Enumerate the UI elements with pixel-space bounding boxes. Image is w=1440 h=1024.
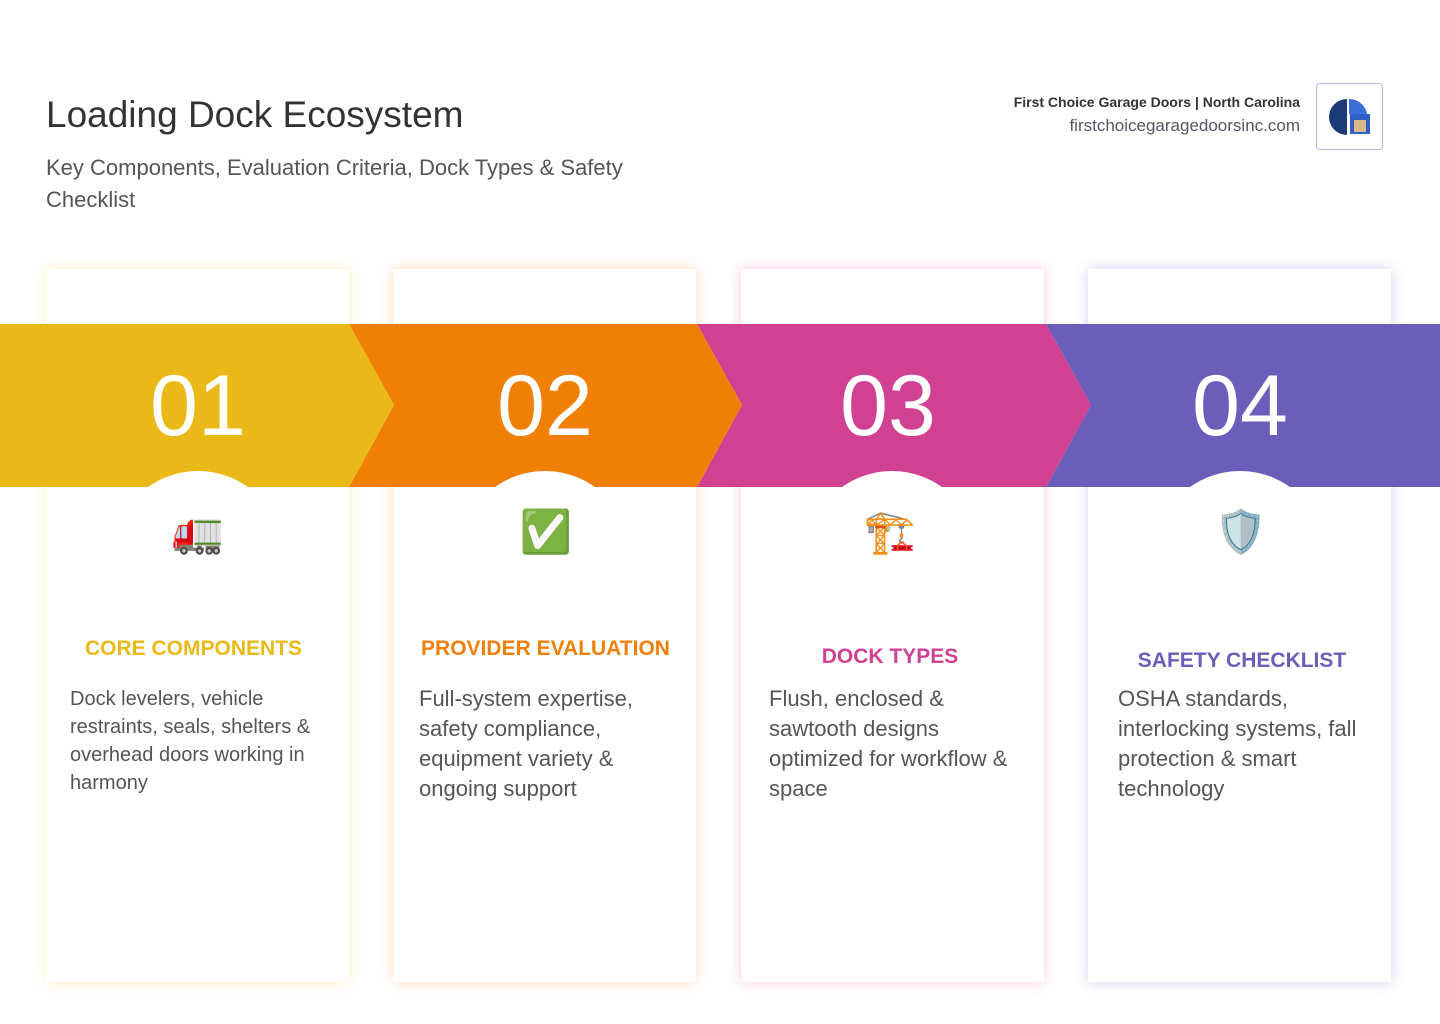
icon: shield: 🛡️ (1215, 508, 1267, 555)
card 2 (393, 269, 696, 982)
heading: provider evaluation: PROVIDER EVALUATION (421, 637, 670, 660)
text: core: Dock levelers, vehicle restraints, seals, shelters & overhead doors working in harmony (70, 688, 310, 794)
brand block: firstchoicegaragedoorsinc.com (1069, 116, 1300, 135)
text: dock types: Flush, enclosed & sawtooth designs optimized for workflow & space (769, 686, 1007, 801)
card 3 (741, 269, 1044, 982)
icon: truck: 🚛 (172, 508, 224, 555)
text: provider: Full-system expertise, safety compliance, equipment variety & ongoing support (419, 686, 633, 801)
icon: crane: 🏗️ (864, 508, 916, 555)
heading: dock types: DOCK TYPES (822, 645, 958, 668)
heading: core components: CORE COMPONENTS (85, 637, 302, 660)
arrow band: 04 (1192, 358, 1288, 454)
heading: safety checklist: SAFETY CHECKLIST (1138, 649, 1346, 672)
subtitle: Key Components, Evaluation Criteria, Dock Types & Safety Checklist (46, 155, 623, 212)
logo (1316, 83, 1383, 150)
title: Loading Dock Ecosystem (46, 94, 463, 135)
card 1 (46, 269, 349, 982)
arrow band: 03 (840, 358, 936, 454)
arrow band: 02 (497, 358, 593, 454)
text: safety: OSHA standards, interlocking systems, fall protection & smart technology (1118, 686, 1356, 801)
brand block: First Choice Garage Doors | North Carolina (1014, 94, 1300, 110)
card 4 (1088, 269, 1391, 982)
arrow band: 01 (150, 358, 246, 454)
brand block (1014, 94, 1300, 135)
icon: check: ✅ (520, 508, 572, 555)
